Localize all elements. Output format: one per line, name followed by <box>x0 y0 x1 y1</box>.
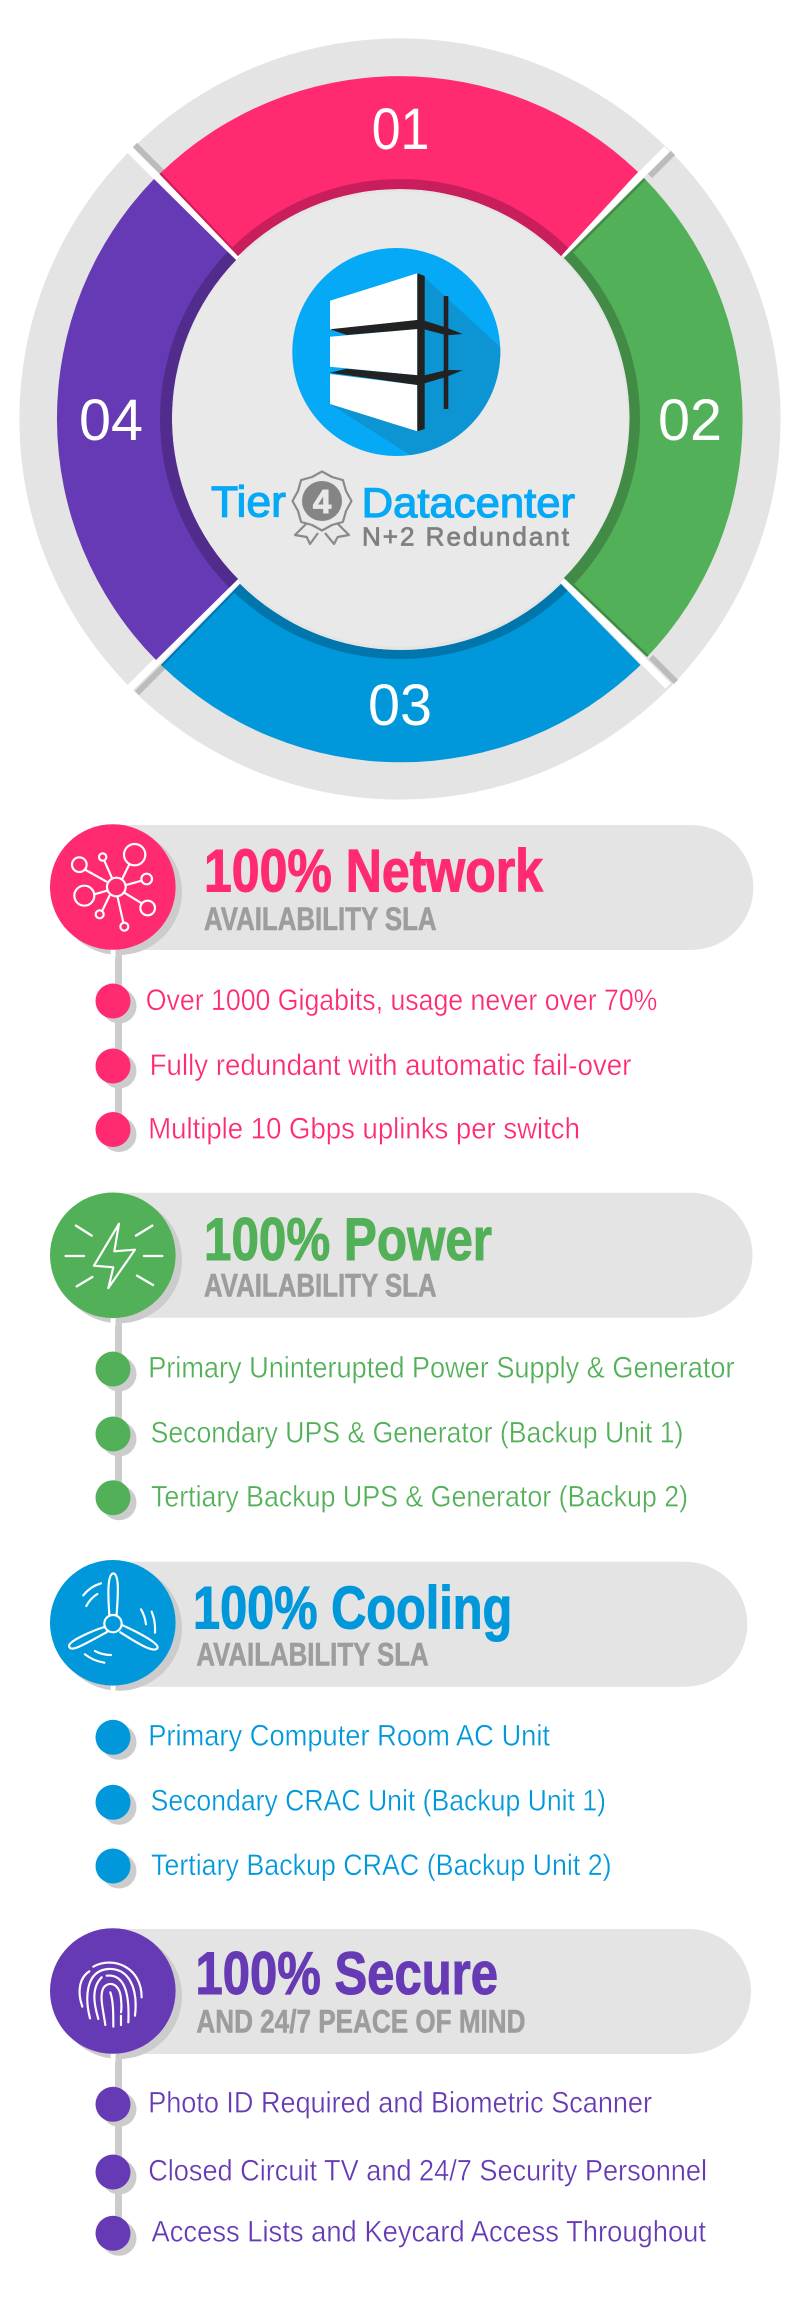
connector line <box>115 1318 122 1498</box>
icon: tier 4 badge <box>292 472 352 544</box>
text: N+2 Redundant: N+2 Redundant <box>362 522 570 552</box>
bullet 2 <box>96 1785 606 1825</box>
bullet 3: Multiple 10 Gbps uplinks per switch <box>148 1112 580 1145</box>
panel: cooling <box>50 1560 747 1888</box>
header pill <box>60 1929 751 2054</box>
bullet 2: Secondary UPS & Generator (Backup Unit 1) <box>151 1417 683 1450</box>
icon: tier 4 badge: 4 <box>313 483 332 520</box>
bullet 2: Fully redundant with automatic fail-over <box>150 1049 631 1082</box>
segment 03 <box>161 584 640 762</box>
subheading: AVAILABILITY SLA <box>204 901 437 937</box>
icon: fingerprint <box>50 1928 182 2062</box>
panel: ring diagram <box>19 38 781 800</box>
header pill <box>60 1562 747 1687</box>
icon: fan <box>50 1560 182 1694</box>
segment 04: 04 <box>79 388 143 453</box>
bullet 3 <box>96 1480 688 1520</box>
segment 03: 03 <box>368 673 432 738</box>
bullet 3 <box>96 1112 580 1152</box>
segment 01 <box>160 76 638 256</box>
bullet 3 <box>96 2216 707 2256</box>
panel: secure <box>50 1928 751 2256</box>
bullet 1 <box>96 2087 652 2127</box>
subheading: AVAILABILITY SLA <box>204 1268 437 1304</box>
bullet 2 <box>96 1048 631 1088</box>
subheading: AVAILABILITY SLA <box>196 1636 429 1672</box>
centre disc <box>173 192 628 647</box>
panel: network <box>50 824 753 1152</box>
bullet 3 <box>96 1848 612 1888</box>
bullet 1: Primary Computer Room AC Unit <box>148 1720 551 1753</box>
outer grey ring <box>19 38 781 800</box>
bullet 2: Secondary CRAC Unit (Backup Unit 1) <box>151 1785 606 1818</box>
bullet 1: Primary Uninterupted Power Supply & Generator <box>148 1352 735 1385</box>
bullet 2: Closed Circuit TV and 24/7 Security Personnel <box>148 2155 707 2188</box>
heading: 100% Power <box>204 1206 492 1273</box>
bullet 3: Tertiary Backup CRAC (Backup Unit 2) <box>151 1849 612 1882</box>
bullet 1 <box>96 1720 551 1760</box>
bullet 3: Tertiary Backup UPS & Generator (Backup 2) <box>151 1481 688 1514</box>
segment 02 <box>564 178 743 657</box>
panel: power <box>50 1192 753 1520</box>
bullet 3: Access Lists and Keycard Access Throughout <box>152 2216 707 2249</box>
bullet 1: Photo ID Required and Biometric Scanner <box>148 2087 652 2120</box>
header pill <box>60 1193 752 1318</box>
icon: power bolt <box>50 1192 182 1326</box>
text: Tier: Tier <box>211 478 286 527</box>
subheading: AND 24/7 PEACE OF MIND <box>196 2004 526 2040</box>
header pill <box>60 825 753 950</box>
segment 02: 02 <box>658 388 722 453</box>
connector line <box>115 950 122 1130</box>
bullet 2 <box>96 2154 707 2194</box>
bullet 1: Over 1000 Gigabits, usage never over 70% <box>146 984 657 1017</box>
bullet 1 <box>96 984 657 1024</box>
connector line <box>115 2054 122 2234</box>
icon: network <box>50 824 182 958</box>
segment 01: 01 <box>372 97 429 162</box>
segment 04 <box>56 179 238 660</box>
icon: datacenter logo <box>292 248 500 456</box>
text: Datacenter: Datacenter <box>362 479 575 526</box>
logo wordmark <box>211 472 575 552</box>
bullet 2 <box>96 1416 683 1456</box>
heading: 100% Secure <box>196 1940 498 2007</box>
heading: 100% Cooling <box>193 1574 512 1641</box>
heading: 100% Network <box>204 838 544 905</box>
